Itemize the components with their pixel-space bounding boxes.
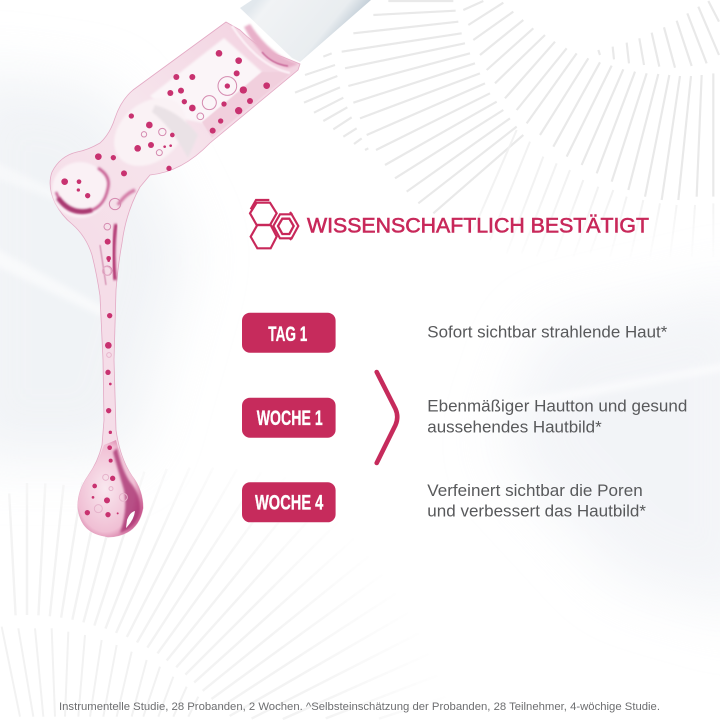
dropper: glass pipette tube	[240, 0, 371, 62]
collar	[244, 24, 298, 68]
drop shadow streak	[113, 448, 140, 533]
serum dots: upper	[61, 50, 270, 261]
badge: Woche 4	[242, 482, 336, 522]
text: week 4 result: Verfeinert sichtbar die Poren	[427, 481, 643, 500]
text: week 1 result: aussehendes Hautbild*	[427, 417, 602, 436]
footnote: Instrumentelle Studie, 28 Probanden, 2 Wochen. ^Selbsteinschätzung der Probanden, 28 Teilnehmer, 4-wöchige Studie.	[59, 701, 660, 713]
badge: Woche 1	[242, 398, 336, 438]
drop highlight	[126, 511, 135, 528]
icon: hexagon molecule	[250, 200, 298, 248]
glass tip	[152, 105, 198, 158]
text: week 1 result	[427, 397, 687, 436]
dropper: pink serum with drop	[50, 22, 300, 537]
sunburst rays: top right	[294, 0, 720, 222]
drop body	[78, 440, 143, 537]
serum body	[50, 22, 300, 537]
stem dark stripe	[114, 224, 116, 280]
serum dots: stem and drop	[85, 259, 119, 517]
badge: Woche 1: WOCHE 1	[257, 407, 323, 430]
badge: Tag 1	[242, 313, 336, 353]
text: week 4 result: und verbessert das Hautbild*	[427, 502, 646, 521]
text: week 1 result: Ebenmäßiger Hautton und gesund	[427, 397, 687, 416]
stem highlight	[106, 270, 111, 450]
serum bubbles: stem and drop	[94, 267, 127, 513]
serum bubbles: upper	[103, 77, 237, 275]
badge: Woche 4: WOCHE 4	[255, 492, 324, 514]
lower wall band	[202, 72, 292, 138]
bulb	[52, 162, 108, 218]
lighter tube interior	[150, 38, 262, 123]
heading: WISSENSCHAFTLICH BESTÄTIGT	[307, 215, 649, 238]
middle chamber	[101, 84, 199, 180]
sunburst rays: bottom left	[1, 493, 355, 720]
text: day 1 result: Sofort sichtbar strahlende Haut*	[427, 322, 668, 341]
text: week 4 result	[427, 481, 646, 521]
badge: Tag 1: TAG 1	[268, 323, 307, 346]
arrow: chevron	[377, 372, 397, 463]
